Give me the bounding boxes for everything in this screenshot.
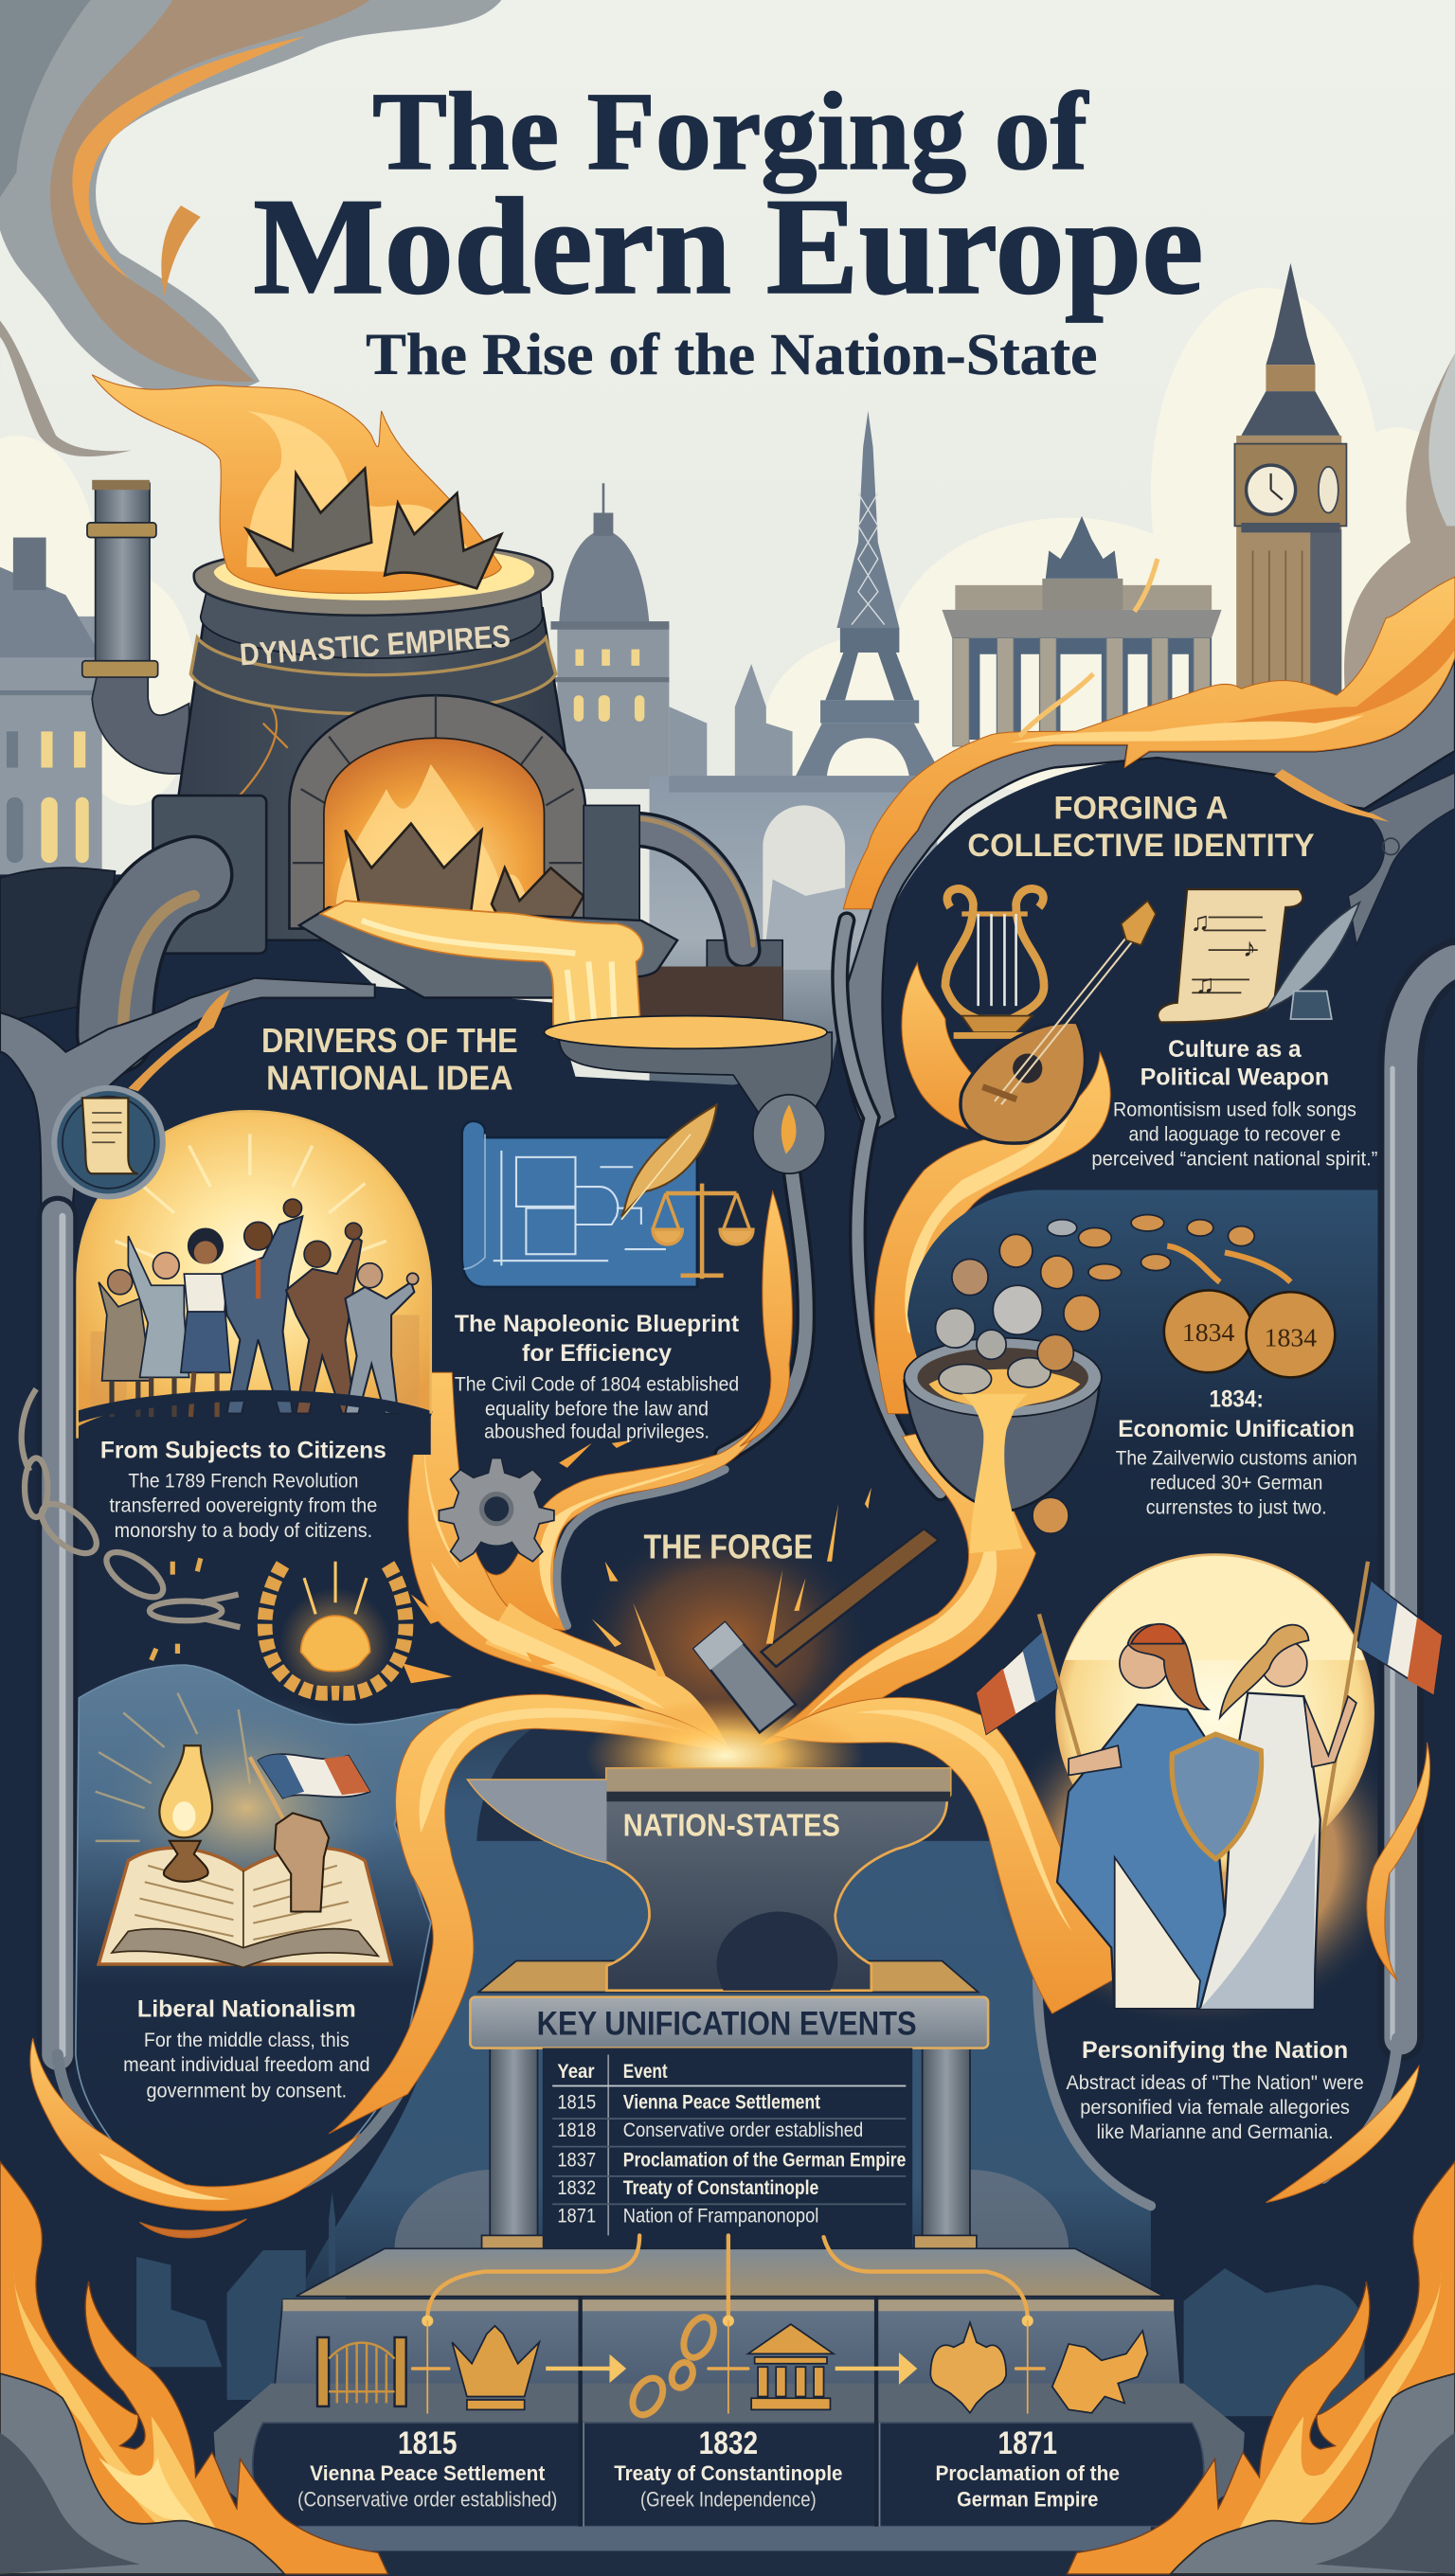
figure: citizen 6 in grey suit — [345, 1263, 419, 1414]
icon: cauldron with coins — [905, 1215, 1290, 1512]
title: Modern Europe — [253, 170, 1203, 323]
icon: scales of justice — [653, 1184, 753, 1279]
heading: forging a collective identity: FORGING A — [1054, 790, 1228, 826]
events table: 1832 — [557, 2177, 596, 2199]
icon: mandolin — [961, 901, 1156, 1143]
heading: culture: Culture as a — [1168, 1036, 1302, 1063]
flame: right arc around anvil — [773, 1697, 1126, 2013]
skyline: Big Ben — [1234, 263, 1346, 707]
body: from subjects: monorshy to a body of citizens. — [115, 1520, 372, 1542]
panel backdrop: personifying — [1037, 1644, 1390, 2211]
heading: drivers: NATIONAL IDEA — [266, 1059, 513, 1098]
heading: napoleonic blueprint — [455, 1311, 740, 1367]
title: The Forging of — [372, 69, 1089, 193]
sun disc behind allegories — [1055, 1553, 1374, 1872]
flames above furnace — [92, 375, 501, 593]
icon: crown — [452, 2326, 539, 2409]
icon: music score and quill — [1158, 889, 1359, 1023]
smoke: right edge — [1344, 353, 1455, 789]
panel edge: liberal nationalism — [58, 2047, 422, 2204]
body: personifying the nation — [1067, 2072, 1364, 2143]
events table: Treaty of Constantinople — [623, 2177, 818, 2199]
body: napoleonic blueprint: aboushed foudal privileges. — [484, 1422, 710, 1443]
icon: gear — [439, 1458, 554, 1562]
column: left — [482, 2048, 544, 2259]
molten pour from cauldron — [961, 1394, 1028, 1553]
body: personifying the nation: personified via female allegories — [1080, 2097, 1350, 2119]
flames: bottom left corner — [0, 2161, 388, 2574]
icon: map of Germany — [1052, 2331, 1147, 2413]
icon: gate — [317, 2337, 406, 2406]
tan glow behind allegories — [990, 1685, 1410, 2030]
heading: culture: Political Weapon — [1141, 1064, 1329, 1090]
body: napoleonic blueprint: equality before the law and — [485, 1398, 709, 1420]
heading: drivers — [261, 1021, 518, 1098]
column label: 1815: (Conservative order established) — [297, 2488, 557, 2512]
skyline: Eiffel Tower — [796, 411, 942, 776]
events table: 1815 — [557, 2092, 596, 2114]
body: economic unification: currenstes to just two. — [1146, 1496, 1327, 1518]
side pipes and flange — [0, 796, 782, 1035]
flame: rising left streams — [403, 1191, 792, 1752]
icon: broken chain — [626, 2313, 720, 2420]
body: personifying the nation: Abstract ideas of "The Nation" were — [1067, 2072, 1364, 2094]
icon: music score and quill: ♫ — [1195, 969, 1215, 998]
heading: napoleonic blueprint: for Efficiency — [522, 1340, 672, 1367]
right frame metal — [1323, 773, 1455, 2178]
body: economic unification: The Zailverwio customs anion — [1116, 1447, 1357, 1469]
flames: bottom right corner — [1067, 2161, 1455, 2574]
heading: liberal nationalism: Liberal Nationalism — [137, 1996, 356, 2023]
flame: right side and lower right wisps — [140, 1743, 1430, 2238]
icon: quill — [621, 1104, 717, 1220]
icon: right flag — [1312, 1562, 1442, 1902]
body: economic unification — [1116, 1447, 1357, 1518]
icon: lyre — [945, 888, 1044, 1039]
flame: bottom of liberal nationalism panel — [30, 2038, 360, 2210]
arrow: 1832 to 1871 — [835, 2357, 914, 2380]
body: economic unification: reduced 30+ German — [1150, 1472, 1322, 1494]
icon: broken chain — [22, 1389, 240, 1660]
gold connectors — [413, 2235, 1044, 2413]
column label: 1871: 1871 — [998, 2425, 1057, 2461]
body: culture: Romontisism used folk songs — [1113, 1099, 1356, 1120]
events table: Year — [557, 2061, 595, 2083]
card: subjects to citizens — [78, 1111, 431, 1542]
skyline: domed building — [550, 483, 669, 789]
events table: Proclamation of the German Empire — [623, 2149, 906, 2171]
heading: economic unification: 1834: — [1210, 1386, 1264, 1413]
base dark field — [0, 751, 1455, 2576]
subtitle: The Rise of the Nation-State — [366, 321, 1098, 387]
events table: Nation of Frampanonopol — [623, 2206, 818, 2227]
body: from subjects: The 1789 French Revolution — [128, 1471, 358, 1493]
heading: the forge: THE FORGE — [643, 1527, 813, 1565]
background: anvil chamber — [296, 1718, 1151, 2301]
smoke and flame swirl: top left — [0, 0, 501, 456]
label: nation-states: NATION-STATES — [623, 1808, 840, 1843]
coin in pour — [1033, 1497, 1069, 1533]
left frame metal — [0, 978, 375, 2054]
events table structure — [395, 1997, 1069, 2259]
icon: oil lamp — [159, 1745, 212, 1882]
icon: eagle — [930, 2322, 1006, 2413]
flame: rising stream beside mandolin — [840, 921, 1110, 1493]
clouds — [0, 288, 1455, 822]
skyline: Brandenburg Gate — [942, 516, 1222, 746]
body: culture: and laoguage to recover e — [1128, 1123, 1340, 1145]
heading: personifying the nation: Personifying the Nation — [1082, 2037, 1348, 2064]
body: from subjects — [109, 1471, 377, 1542]
icon: laurel wreath with sun — [265, 1562, 405, 1700]
column label: 1815: 1815 — [398, 2425, 457, 2461]
flame: left arc around anvil — [329, 1694, 740, 2134]
lintel — [470, 1997, 988, 2048]
furnace chimney — [82, 480, 189, 774]
bottom city silhouette — [136, 2192, 1365, 2416]
crown: in furnace — [345, 824, 482, 927]
skyline: town and bridge — [650, 664, 937, 1101]
column label: 1832: (Greek Independence) — [640, 2488, 817, 2512]
icon: 1834 coins — [1164, 1290, 1335, 1377]
body: culture: perceived “ancient national spirit.” — [1091, 1149, 1377, 1171]
heading: drivers: DRIVERS OF THE — [261, 1021, 518, 1060]
column label: 1815: Vienna Peace Settlement — [310, 2461, 546, 2485]
figure: citizen 2 — [128, 1236, 189, 1417]
icon: temple — [748, 2324, 834, 2409]
column label: 1871 — [936, 2425, 1120, 2512]
heading: economic unification — [1118, 1386, 1355, 1442]
icon: blueprint — [462, 1121, 697, 1287]
column label: 1832: 1832 — [699, 2425, 758, 2461]
heading: culture — [1141, 1036, 1329, 1090]
skyline: left building — [0, 538, 102, 887]
icon: music score and quill: ♫ — [1191, 906, 1210, 936]
panel: liberal nationalism backdrop — [76, 1665, 456, 2201]
heading: key unification events: KEY UNIFICATION EVENTS — [537, 2005, 917, 2043]
heading: forging a collective identity — [967, 790, 1315, 864]
body: liberal nationalism: For the middle class, this — [144, 2030, 350, 2051]
title — [253, 69, 1203, 387]
figure: citizen 4 in blue suit — [222, 1199, 302, 1414]
body: liberal nationalism: government by consent. — [146, 2081, 347, 2102]
panel: liberal nationalism content — [90, 1693, 403, 2102]
figure: Marianne — [1057, 1624, 1225, 2009]
events table: Vienna Peace Settlement — [623, 2092, 820, 2114]
column label: 1815 — [297, 2425, 557, 2512]
furnace with crowns — [92, 375, 595, 944]
sky background — [0, 0, 1455, 1151]
events table: Event — [623, 2061, 668, 2083]
panel: personifying the nation — [977, 1562, 1442, 2143]
molten metal basin and spout — [299, 901, 832, 1455]
events table: 1837 — [557, 2149, 596, 2171]
label: dynastic empires: DYNASTIC EMPIRES — [239, 618, 512, 671]
background: navy arches over anvil — [476, 1718, 995, 1841]
anvil pedestal top — [478, 1961, 979, 1993]
icon: shield — [1172, 1734, 1262, 1859]
flame and metal rim: forging panel — [842, 559, 1455, 1135]
icon: scroll medallion — [54, 1088, 163, 1197]
icon: left flag — [977, 1614, 1097, 1816]
heading: napoleonic blueprint: The Napoleonic Blueprint — [455, 1311, 740, 1337]
heading: forging a collective identity: COLLECTIVE IDENTITY — [967, 828, 1315, 864]
flame: pour stream to anvil — [760, 1421, 1035, 1745]
events table: 1818 — [557, 2120, 596, 2141]
heading: economic unification: Economic Unification — [1118, 1416, 1355, 1442]
figure: citizen 5 in brown suit — [286, 1223, 362, 1414]
body: from subjects: transferred oovereignty from the — [109, 1495, 377, 1517]
icon: hammer — [592, 1488, 939, 1732]
body: culture — [1091, 1099, 1377, 1171]
timeline base — [214, 2235, 1245, 2576]
icon: music score and quill: ♪ — [1243, 933, 1256, 962]
column: right — [914, 2048, 977, 2259]
events table: Conservative order established — [623, 2120, 863, 2141]
figure: citizen 3 — [181, 1227, 230, 1417]
icon: raised hand with flag — [250, 1754, 370, 1911]
forge glow — [575, 1520, 871, 1767]
icon: 1834 coins: 1834 — [1265, 1323, 1317, 1352]
forge sparks glow — [585, 1698, 865, 1813]
body: napoleonic blueprint — [455, 1373, 739, 1443]
icon: open book — [99, 1848, 391, 1967]
crown: left melting — [246, 469, 371, 575]
column label: 1832 — [614, 2425, 842, 2512]
panel: economic unification — [905, 1190, 1377, 1553]
events table — [543, 2048, 912, 2248]
panel edge: personifying — [1037, 1980, 1151, 2206]
figure: citizen 1 — [99, 1270, 152, 1417]
panel: forging a collective identity — [945, 790, 1377, 1171]
icon: 1834 coins: 1834 — [1182, 1318, 1235, 1348]
anvil — [469, 1768, 950, 1991]
sun disc upper edge over coin panel — [1066, 1556, 1365, 1660]
events table: 1871 — [557, 2206, 596, 2227]
column label: 1832: Treaty of Constantinople — [614, 2461, 842, 2485]
body: liberal nationalism: meant individual freedom and — [123, 2054, 370, 2076]
body: personifying the nation: like Marianne and Germania. — [1097, 2121, 1334, 2143]
column label: 1871: Proclamation of the — [936, 2461, 1120, 2485]
figure: Germania — [1200, 1625, 1356, 2009]
crown: right melting — [385, 493, 501, 588]
body: napoleonic blueprint: The Civil Code of 1804 established — [455, 1373, 739, 1395]
heading: from subjects: From Subjects to Citizens — [100, 1437, 386, 1463]
column label: 1871: German Empire — [957, 2488, 1098, 2512]
arrow: 1815 to 1832 — [546, 2359, 623, 2378]
crown: small in furnace — [492, 868, 584, 944]
body: liberal nationalism — [123, 2030, 370, 2102]
